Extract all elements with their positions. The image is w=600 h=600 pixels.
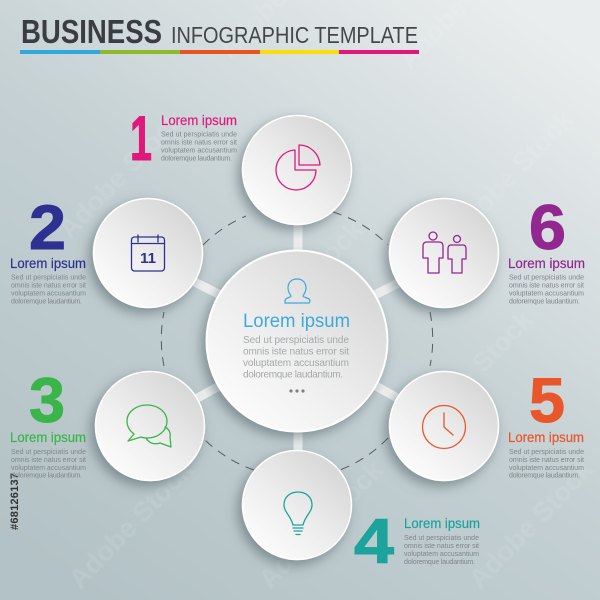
title xyxy=(21,13,418,50)
body 4: doloremque laudantium. xyxy=(404,559,475,566)
icon: pie chart xyxy=(276,145,320,190)
heading 4: Lorem ipsum xyxy=(404,516,480,531)
body 3: voluptatem accusantium xyxy=(11,465,86,472)
heading 1: Lorem ipsum xyxy=(161,113,237,128)
item 6 xyxy=(508,193,585,306)
body 5: voluptatem accusantium xyxy=(509,465,584,472)
body 3: omnis iste natus error sit xyxy=(11,457,86,464)
number 4: 4 xyxy=(354,507,394,577)
icon: light bulb xyxy=(284,492,312,534)
watermark: Adobe Stock xyxy=(463,454,600,594)
item 1 xyxy=(130,104,237,174)
central text: omnis iste natus error sit xyxy=(243,346,349,358)
heading 2: Lorem ipsum xyxy=(10,256,86,271)
circle 2: calendar xyxy=(94,198,202,308)
body 4 xyxy=(404,535,479,566)
heading 3: Lorem ipsum xyxy=(10,430,86,445)
circle 3: chat xyxy=(96,372,204,480)
body 4: voluptatem accusantium xyxy=(404,551,479,558)
circle 5: clock xyxy=(390,372,498,480)
body 2 xyxy=(11,274,86,306)
circle 4: light bulb xyxy=(242,450,352,560)
central text: Sed ut perspiciatis unde xyxy=(243,335,349,346)
body 1: doloremque laudantium. xyxy=(161,156,232,162)
icon: speech bubbles xyxy=(127,405,171,447)
body 1: voluptatem accusantium xyxy=(161,148,237,154)
body 1 xyxy=(161,132,237,162)
central circle xyxy=(206,250,388,432)
body 2: doloremque laudantium. xyxy=(11,298,82,306)
body 2: omnis iste natus error sit xyxy=(11,282,86,290)
title: INFOGRAPHIC TEMPLATE xyxy=(171,23,418,48)
title: BUSINESS xyxy=(21,13,162,50)
body 5: doloremque laudantium. xyxy=(509,472,580,480)
watermark: Adobe Stock xyxy=(253,454,390,594)
body 3: doloremque laudantium. xyxy=(11,472,82,480)
body 6: doloremque laudantium. xyxy=(509,298,580,306)
body 3: Sed ut perspiciatis unde xyxy=(11,449,86,456)
watermark: Adobe Stock xyxy=(53,104,190,244)
body 2: Sed ut perspiciatis unde xyxy=(11,274,86,282)
body 6 xyxy=(509,274,584,306)
icon: people xyxy=(423,232,466,273)
watermark: Adobe Stock xyxy=(63,454,200,594)
body 6: Sed ut perspiciatis unde xyxy=(509,274,584,282)
number 1: 1 xyxy=(130,104,152,174)
title colour bar xyxy=(20,50,419,54)
item 2 xyxy=(10,193,86,306)
icon: clock xyxy=(422,406,466,448)
body 2: voluptatem accusantium xyxy=(11,290,86,298)
number 2: 2 xyxy=(29,193,66,263)
icon: calendar: 11 xyxy=(140,250,156,267)
central text: voluptatem accusantium xyxy=(243,358,349,369)
watermark: Adobe Stock xyxy=(443,104,580,244)
icon: user xyxy=(285,279,310,303)
dots xyxy=(289,389,305,393)
body 5: Sed ut perspiciatis unde xyxy=(509,449,584,456)
item 5 xyxy=(508,366,584,480)
body 6: omnis iste natus error sit xyxy=(509,282,584,290)
body 1: omnis iste natus error sit xyxy=(161,140,237,146)
stock id: #68126137 xyxy=(9,473,21,530)
body 3 xyxy=(11,449,86,480)
circle 6: people xyxy=(390,198,498,308)
number 6: 6 xyxy=(529,193,566,263)
watermark: Adobe Stock xyxy=(403,304,540,444)
body 5: omnis iste natus error sit xyxy=(509,457,584,464)
central heading: Lorem ipsum xyxy=(243,311,350,332)
body 4: omnis iste natus error sit xyxy=(404,543,479,550)
central text xyxy=(243,335,349,380)
body 1: Sed ut perspiciatis unde xyxy=(161,132,237,138)
body 5 xyxy=(509,449,584,480)
body 4: Sed ut perspiciatis unde xyxy=(404,535,479,542)
number 3: 3 xyxy=(29,366,65,436)
dashed ring xyxy=(161,212,433,470)
circle 1: pie chart xyxy=(242,116,352,224)
watermark: Adobe Stock xyxy=(233,214,370,354)
heading 6: Lorem ipsum xyxy=(508,256,585,271)
item 3 xyxy=(10,366,86,480)
body 6: voluptatem accusantium xyxy=(509,290,584,298)
item 4 xyxy=(354,507,480,577)
connectors xyxy=(185,215,410,460)
number 5: 5 xyxy=(529,366,565,436)
central text: doloremque laudantium. xyxy=(243,370,343,380)
heading 5: Lorem ipsum xyxy=(508,430,584,445)
